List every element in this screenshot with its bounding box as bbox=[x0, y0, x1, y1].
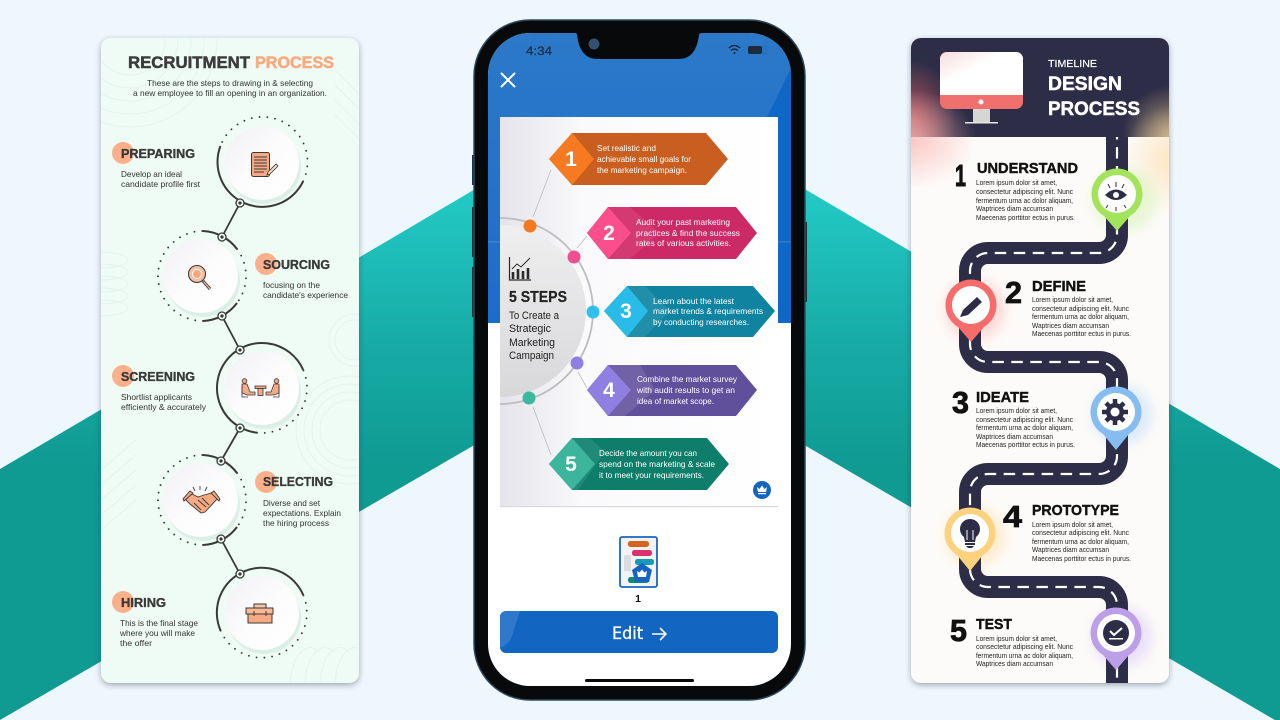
step 3: ideate: IDEATE bbox=[976, 390, 1029, 406]
panel: design process timeline bbox=[907, 36, 1173, 689]
step 5: test: 5 bbox=[950, 613, 967, 648]
step 4: prototype: Waptrices diam accumsan bbox=[1032, 545, 1109, 554]
intro text: a new employee to fill an opening in an organization. bbox=[133, 88, 327, 98]
header title: TIMELINE bbox=[1048, 58, 1097, 70]
center heading: Campaign bbox=[509, 350, 554, 362]
icon: eye bbox=[1105, 182, 1127, 211]
step 3: ideate: consectetur adipiscing elit. Nunc bbox=[976, 415, 1073, 424]
icon: crown badge bbox=[753, 481, 771, 499]
step 1: understand: Waptrices diam accumsan bbox=[976, 204, 1053, 213]
step hexagon 2 bbox=[587, 207, 757, 259]
step 2: define: consectetur adipiscing elit. Nunc bbox=[1032, 304, 1129, 313]
label: sourcing: SOURCING bbox=[263, 258, 330, 272]
intro text bbox=[133, 78, 327, 98]
step 4: prototype: Maecenas porttitor ectus in purus. bbox=[1032, 554, 1131, 563]
step 4: prototype: consectetur adipiscing elit. Nunc bbox=[1032, 528, 1129, 537]
step hexagon 3: by conducting researches. bbox=[653, 317, 749, 327]
label: selecting: expectations. Explain bbox=[263, 508, 341, 518]
step hexagon 1 bbox=[549, 133, 728, 185]
label: selecting: SELECTING bbox=[263, 475, 333, 489]
blue header bbox=[488, 33, 791, 323]
step: selecting circle bbox=[158, 455, 246, 545]
label: screening bbox=[112, 365, 207, 412]
step 1: understand bbox=[955, 158, 1078, 222]
step hexagon 2: 2 bbox=[603, 222, 615, 245]
center heading: Marketing bbox=[509, 337, 555, 349]
icon: light bulb bbox=[960, 519, 980, 548]
status time: 4:34 bbox=[526, 46, 553, 58]
step hexagon 3: 3 bbox=[620, 300, 632, 323]
side buttons bbox=[472, 155, 807, 317]
label: screening: efficiently & accurately bbox=[121, 402, 207, 412]
label: hiring: HIRING bbox=[121, 596, 166, 610]
step hexagon 4 bbox=[587, 365, 757, 416]
step hexagon 5: 5 bbox=[565, 453, 577, 476]
label: selecting: the hiring process bbox=[263, 518, 329, 528]
step 1: understand: Lorem ipsum dolor sit amet, bbox=[976, 178, 1057, 187]
step 3: ideate: Waptrices diam accumsan bbox=[976, 432, 1053, 441]
step 5: test bbox=[950, 613, 1073, 668]
step 1: understand: consectetur adipiscing elit. Nunc bbox=[976, 187, 1073, 196]
icon: pencil bbox=[960, 297, 982, 317]
step hexagon 1: Set realistic and bbox=[597, 143, 656, 153]
pin: test bbox=[1090, 608, 1142, 670]
connector nodes bbox=[217, 199, 244, 578]
step hexagon 1: achievable small goals for bbox=[597, 154, 691, 164]
step 4: prototype: 4 bbox=[1003, 499, 1023, 534]
step hexagon 4: Combine the market survey bbox=[637, 374, 738, 384]
step 4: prototype: Lorem ipsum dolor sit amet, bbox=[1032, 520, 1113, 529]
step 1: understand: 1 bbox=[955, 158, 966, 193]
step 2: define: 2 bbox=[1005, 275, 1022, 310]
step 2: define: Lorem ipsum dolor sit amet, bbox=[1032, 295, 1113, 304]
label: hiring: the offer bbox=[120, 638, 152, 648]
center heading bbox=[509, 289, 567, 362]
step 2: define: fermentum urna ac dolor aliquam, bbox=[1032, 312, 1129, 321]
label: preparing: candidate profile first bbox=[121, 179, 201, 189]
step hexagon 2: Audit your past marketing bbox=[636, 217, 730, 227]
panel: recruitment process bbox=[97, 36, 363, 689]
label: preparing: PREPARING bbox=[121, 147, 195, 161]
icon: gear bbox=[1102, 399, 1128, 425]
step: sourcing circle bbox=[158, 231, 246, 321]
step: preparing circle bbox=[218, 117, 308, 207]
center heading: Strategic bbox=[509, 323, 551, 335]
step 1: understand: fermentum urna ac dolor aliquam, bbox=[976, 196, 1073, 205]
icon: close bbox=[501, 73, 515, 87]
step 1: understand: Maecenas porttitor ectus in purus. bbox=[976, 213, 1075, 222]
winding road bbox=[970, 137, 1117, 683]
icon: briefcase bbox=[246, 604, 273, 623]
step 5: test: Waptrices diam accumsan bbox=[976, 659, 1053, 668]
step 3: ideate: fermentum urna ac dolor aliquam, bbox=[976, 423, 1073, 432]
step 2: define: Waptrices diam accumsan bbox=[1032, 321, 1109, 330]
leader lines bbox=[533, 170, 587, 455]
step hexagon 5 bbox=[549, 438, 729, 490]
header title: PROCESS bbox=[1048, 98, 1140, 120]
central disc bbox=[500, 225, 586, 397]
title: PROCESS bbox=[255, 53, 334, 72]
step hexagon 1: 1 bbox=[565, 148, 577, 171]
home indicator bbox=[585, 679, 694, 682]
notch bbox=[575, 33, 702, 59]
step 5: test: fermentum urna ac dolor aliquam, bbox=[976, 651, 1073, 660]
step hexagon 3: market trends & requirements bbox=[653, 306, 763, 316]
step hexagon 3: Learn about the latest bbox=[653, 296, 735, 306]
pin: ideate bbox=[1090, 386, 1142, 450]
step 5: test: consectetur adipiscing elit. Nunc bbox=[976, 642, 1073, 651]
step hexagon 5: Decide the amount you can bbox=[599, 448, 697, 458]
label: hiring bbox=[112, 591, 198, 648]
step hexagon 2: practices & find the success bbox=[636, 228, 740, 238]
pin: understand bbox=[1092, 168, 1142, 231]
label: selecting: Diverse and set bbox=[263, 498, 321, 508]
step 4: prototype bbox=[1003, 499, 1131, 563]
step hexagon 3 bbox=[604, 286, 775, 337]
edit button: Edit bbox=[612, 624, 643, 644]
header title: DESIGN bbox=[1048, 73, 1122, 95]
step 4: prototype: PROTOTYPE bbox=[1032, 503, 1119, 519]
step hexagon 5: spend on the marketing & scale bbox=[599, 459, 715, 469]
icon: interview table bbox=[242, 379, 279, 397]
phone mockup bbox=[472, 19, 807, 701]
label: sourcing: focusing on the bbox=[263, 280, 320, 290]
step hexagon 4: idea of market scope. bbox=[637, 396, 714, 406]
pin: prototype bbox=[944, 508, 996, 571]
icon: monitor bbox=[940, 52, 1023, 124]
icon: wifi and battery bbox=[729, 46, 766, 54]
step: hiring circle bbox=[217, 568, 307, 658]
step hexagon 4: 4 bbox=[603, 379, 615, 402]
label: hiring: This is the final stage bbox=[120, 618, 198, 628]
node dots bbox=[522, 220, 600, 404]
step: screening circle bbox=[217, 343, 307, 433]
step 3: ideate: 3 bbox=[952, 385, 969, 420]
label: hiring: where you will make bbox=[119, 628, 195, 638]
icon: arrow bbox=[652, 628, 666, 640]
label: selecting bbox=[255, 471, 341, 528]
title: RECRUITMENT bbox=[128, 53, 251, 72]
edit button bbox=[500, 611, 778, 653]
icon: document bbox=[252, 152, 278, 176]
icon: handshake bbox=[183, 486, 220, 513]
intro text: These are the steps to drawing in & selecting bbox=[147, 78, 313, 88]
step 5: test: Lorem ipsum dolor sit amet, bbox=[976, 634, 1057, 643]
label: sourcing bbox=[255, 253, 348, 300]
step 1: understand: UNDERSTAND bbox=[977, 161, 1078, 177]
step hexagon 5: it to meet your requirements. bbox=[599, 470, 704, 480]
step 3: ideate: Maecenas porttitor ectus in purus. bbox=[976, 440, 1075, 449]
page number: 1 bbox=[635, 593, 641, 605]
label: preparing: Develop an ideal bbox=[121, 169, 182, 179]
step 3: ideate: Lorem ipsum dolor sit amet, bbox=[976, 406, 1057, 415]
infographic card bbox=[500, 117, 778, 508]
step hexagon 4: with audit results to get an bbox=[636, 385, 735, 395]
header title bbox=[1048, 58, 1140, 120]
step hexagon 2: rates of various activities. bbox=[636, 238, 731, 248]
step hexagon 1: the marketing campaign. bbox=[597, 165, 687, 175]
icon: magnifier bbox=[188, 266, 210, 289]
pin: define bbox=[946, 280, 996, 342]
step 4: prototype: fermentum urna ac dolor aliquam, bbox=[1032, 537, 1129, 546]
icon: chart bbox=[510, 257, 531, 280]
header band bbox=[911, 38, 1169, 137]
connector chain bbox=[221, 203, 240, 574]
step 2: define: DEFINE bbox=[1032, 279, 1086, 295]
label: screening: SCREENING bbox=[121, 370, 195, 384]
center heading: To Create a bbox=[509, 310, 560, 322]
step 5: test: TEST bbox=[976, 617, 1012, 633]
label: preparing bbox=[112, 142, 201, 189]
label: screening: Shortlist applicants bbox=[121, 392, 192, 402]
title bbox=[128, 53, 334, 72]
icon: camera bbox=[588, 38, 600, 50]
step 3: ideate bbox=[952, 385, 1075, 449]
page thumbnail bbox=[620, 537, 657, 587]
icon: check badge bbox=[1103, 620, 1129, 646]
label: sourcing: candidate's experience bbox=[263, 290, 348, 300]
center heading: 5 STEPS bbox=[509, 289, 567, 306]
step 2: define bbox=[1005, 275, 1131, 338]
step 2: define: Maecenas porttitor ectus in purus. bbox=[1032, 329, 1131, 338]
